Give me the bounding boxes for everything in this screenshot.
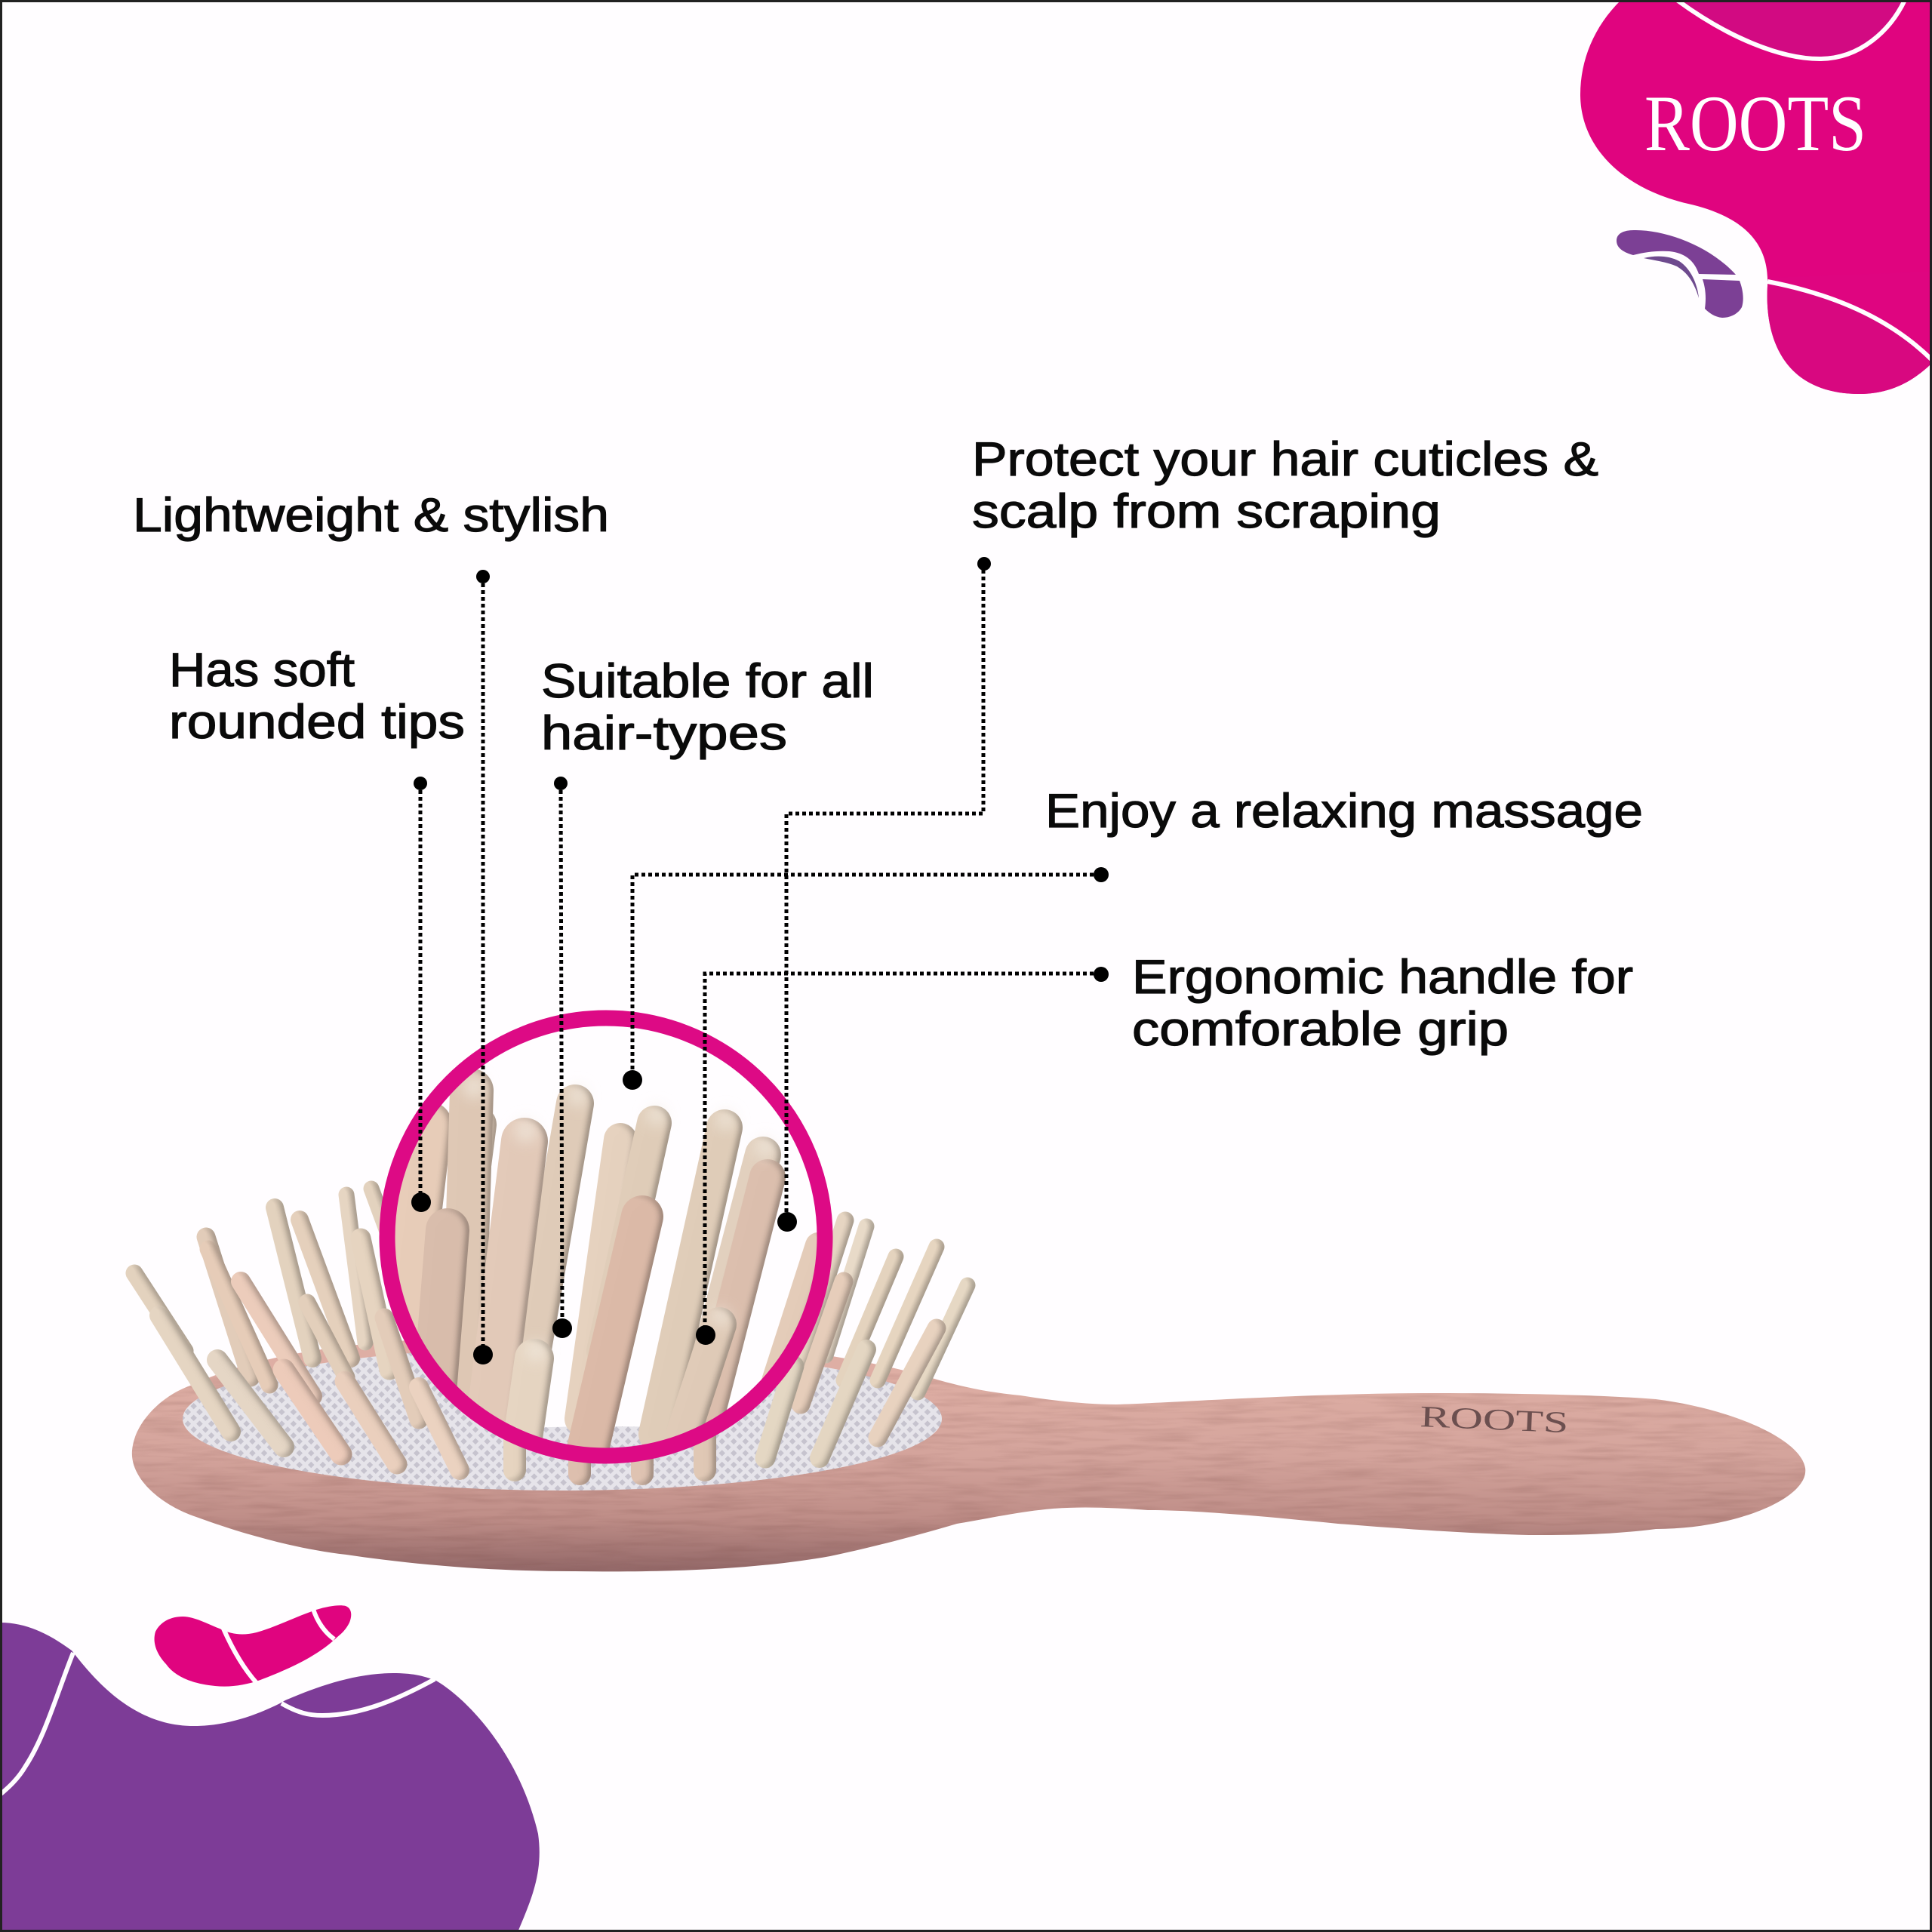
- enlarged pins: [404, 1091, 818, 1468]
- text: soft tips: rounded tips: [169, 696, 465, 749]
- pin tip highlights: [462, 1075, 776, 1361]
- text: ergonomic handle: Ergonomic handle for: [1132, 951, 1633, 1004]
- text: protect: [972, 433, 1598, 538]
- icon: pink swoosh bottom: [155, 1605, 351, 1687]
- text: ergonomic handle: [1132, 951, 1633, 1056]
- logo: ROOTS: ROOTS: [1644, 79, 1866, 168]
- text: all hair types: hair-types: [541, 707, 787, 760]
- icon: purple swoosh top: [1617, 230, 1743, 318]
- text: protect: Protect your hair cuticles &: [972, 433, 1598, 486]
- blob: pink top right: [1580, 0, 1931, 394]
- text: ergonomic handle: comforable grip: [1132, 1003, 1509, 1056]
- blob: purple bottom left: [0, 1623, 540, 1932]
- text: massage: Enjoy a relaxing massage: [1045, 785, 1643, 838]
- text: all hair types: Suitable for all: [541, 655, 874, 708]
- text: all hair types: [541, 655, 874, 760]
- callout: lines and dots: [411, 557, 1109, 1364]
- brush body: [132, 1336, 1805, 1571]
- text: soft tips: [169, 644, 465, 749]
- magnifier ring: [387, 1018, 825, 1456]
- bristles: outer pins: [134, 1189, 968, 1474]
- magnifier: enlarged bristles: [395, 1069, 817, 1447]
- brush pad: [183, 1347, 942, 1491]
- text: lightweight: Lightweight & stylish: [133, 489, 609, 542]
- text: soft tips: Has soft: [169, 644, 355, 697]
- text: protect: scalp from scraping: [972, 485, 1441, 538]
- wood grain texture: [132, 1336, 1805, 1571]
- logo on handle: ROOTS: [1420, 1399, 1569, 1439]
